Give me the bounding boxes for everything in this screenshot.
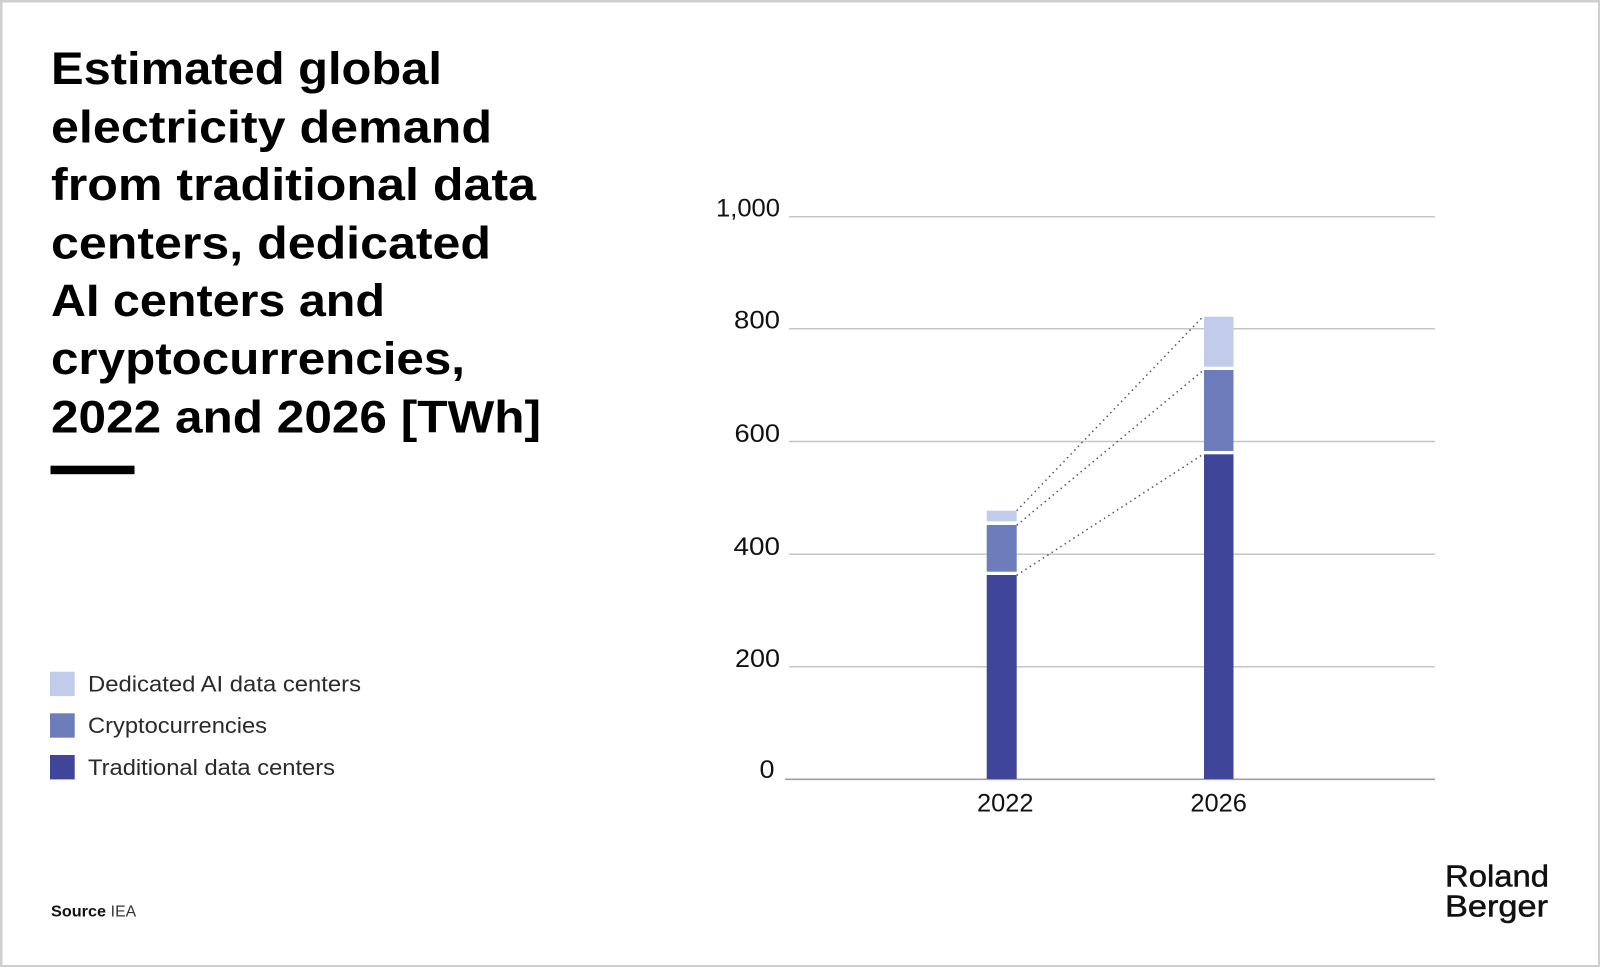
x-axis labels: 2026: [1190, 790, 1247, 818]
title: [51, 43, 541, 442]
connector dotted lines: [1017, 316, 1204, 575]
source note: IEA: [111, 904, 137, 921]
x-axis baseline: [785, 778, 1435, 780]
logo: Roland Berger: Berger: [1445, 889, 1548, 924]
y-axis gridlines: [789, 217, 1435, 667]
title: cryptocurrencies,: [51, 333, 465, 384]
title: 2022 and 2026 [TWh]: [51, 391, 541, 442]
y-axis labels: 0: [760, 756, 774, 784]
source note: [51, 904, 137, 921]
y-axis labels: 1,000: [716, 195, 780, 223]
y-axis labels: 200: [735, 645, 780, 673]
stacked bar chart: [716, 195, 1435, 818]
y-axis labels: 600: [734, 420, 780, 448]
y-axis labels: [716, 195, 780, 784]
title: from traditional data: [51, 159, 537, 210]
source note: Source: [51, 904, 106, 921]
title: Estimated global: [51, 43, 442, 94]
y-axis labels: 400: [734, 533, 780, 561]
x-axis labels: [977, 790, 1247, 818]
logo: Roland Berger: Roland: [1445, 859, 1549, 894]
bar: 2022: [987, 511, 1017, 779]
x-axis labels: 2022: [977, 790, 1034, 818]
logo: Roland Berger: [1445, 859, 1549, 924]
y-axis labels: 800: [734, 306, 780, 334]
bar: 2026: [1204, 317, 1234, 779]
title accent bar: [50, 466, 134, 474]
title: AI centers and: [51, 275, 385, 326]
title: electricity demand: [51, 102, 492, 153]
legend item: traditional data centers: Traditional data centers: [88, 755, 335, 780]
legend item: cryptocurrencies: Cryptocurrencies: [88, 713, 267, 738]
legend: [50, 672, 361, 780]
title: centers, dedicated: [51, 217, 491, 268]
legend item: dedicated AI data centers: Dedicated AI data centers: [88, 672, 361, 697]
